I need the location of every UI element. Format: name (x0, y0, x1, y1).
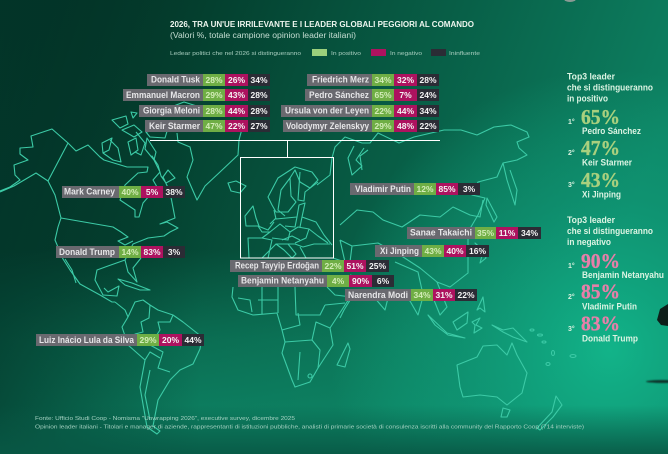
rank 1 negative: 90% (581, 249, 620, 273)
title: 2026, TRA UN'UE IRRILEVANTE E I LEADER GLOBALI PEGGIORI AL COMANDO (170, 20, 474, 29)
bar: Pedro Sánchez: 24% (419, 90, 437, 100)
bar: Luiz Inácio Lula da Silva: Luiz Inácio Lula da Silva (39, 335, 135, 345)
bar: Friedrich Merz: 34% (374, 75, 392, 85)
rank 2 negative (568, 280, 637, 312)
bar: Sanae Takaichi: Sanae Takaichi (410, 228, 472, 238)
bar: Mark Carney: 38% (165, 187, 183, 197)
rank 1 positive: 1° (568, 118, 575, 126)
bar: Giorgia Meloni: 28% (250, 106, 268, 116)
bar: Volodymyr Zelenskyy: 29% (374, 121, 392, 131)
rank 3 positive (568, 168, 621, 200)
source footnote: Opinion leader italiani - Titolari e manager di aziende, rappresentanti di istituzioni pubbliche, analisti di primarie società di consulenza iscritti alla community del Rapporto Coop (714 interviste) (35, 424, 584, 430)
bar: Donald Trump: Donald Trump (59, 247, 115, 257)
bar: Ursula von der Leyen: 22% (374, 106, 392, 116)
heading: top 3 negative: in negativo (567, 237, 612, 247)
bar: Donald Tusk (147, 74, 270, 86)
legend: In negativo (390, 51, 422, 57)
heading: top 3 negative: che si distingueranno (567, 226, 654, 236)
rank 2 negative: 85% (581, 280, 620, 304)
bar: Donald Tusk: 28% (205, 75, 223, 85)
heading: top 3 negative (567, 215, 654, 247)
bar: Friedrich Merz (307, 74, 439, 86)
heading: top 3 positive: in positivo (567, 94, 609, 104)
bar: Sanae Takaichi: 34% (521, 228, 538, 238)
heading: top 3 positive: che si distingueranno (567, 82, 654, 92)
bar: Ursula von der Leyen: Ursula von der Leyen (285, 106, 369, 116)
bar: Giorgia Meloni: Giorgia Meloni (143, 106, 200, 116)
rank 1 positive (568, 105, 642, 136)
bar: Vladimir Putin: 3% (463, 184, 476, 194)
bar: Friedrich Merz: Friedrich Merz (312, 74, 369, 84)
rank 3 positive: 43% (581, 168, 620, 192)
rank 2 positive: Keir Starmer (582, 158, 633, 168)
map: Africa (232, 287, 352, 387)
bar: Keir Starmer: 47% (205, 121, 223, 131)
bar: Volodymyr Zelenskyy: 22% (419, 121, 437, 131)
bar: Luiz Inácio Lula da Silva (36, 334, 204, 346)
legend (170, 49, 480, 57)
legend: In positivo (331, 51, 361, 57)
bar: Recep Tayyip Erdoğan: 22% (324, 261, 342, 271)
bar: Xi Jinping: 16% (469, 246, 486, 256)
bar: Emmanuel Macron (123, 89, 270, 101)
bar: Donald Trump (56, 246, 185, 258)
bar: Sanae Takaichi: 11% (499, 228, 516, 238)
bar: Donald Tusk: 26% (228, 75, 245, 85)
rank 2 positive (568, 136, 633, 168)
bar: Keir Starmer: 27% (250, 121, 268, 131)
bar: Ursula von der Leyen (281, 105, 439, 117)
map: North America (0, 112, 178, 302)
bar: Pedro Sánchez: Pedro Sánchez (309, 90, 369, 100)
bar: Benjamin Netanyahu: 90% (352, 276, 369, 286)
bar: Vladimir Putin: Vladimir Putin (355, 184, 411, 194)
subtitle: (Valori %, totale campione opinion leader italiani) (170, 31, 356, 40)
bar: Volodymyr Zelenskyy (283, 120, 439, 132)
bar: Ursula von der Leyen: 44% (397, 106, 414, 116)
bar: Mark Carney: Mark Carney (64, 186, 115, 196)
bar: Friedrich Merz: 28% (419, 75, 437, 85)
bar: Donald Tusk: Donald Tusk (151, 74, 201, 84)
bar: Pedro Sánchez: 65% (374, 90, 392, 100)
bar: Luiz Inácio Lula da Silva: 44% (184, 335, 202, 345)
legend: Ininfluente (449, 51, 480, 57)
map: Europe (245, 167, 332, 258)
bar: Ursula von der Leyen: 34% (419, 106, 437, 116)
rank 2 positive: 2° (568, 149, 575, 157)
bar: Mark Carney (62, 186, 185, 198)
bar: Emmanuel Macron: 29% (205, 90, 223, 100)
bar: Vladimir Putin: 12% (416, 184, 434, 194)
panel: top 3 positive (567, 72, 654, 200)
bar: Friedrich Merz: 32% (397, 75, 414, 85)
bar: Luiz Inácio Lula da Silva: 20% (162, 335, 179, 345)
decorative object at right edge (564, 0, 668, 383)
connector lines and Europe box (150, 140, 440, 258)
rank 1 negative (568, 249, 664, 280)
bar: Keir Starmer: 22% (228, 121, 245, 131)
bar: Giorgia Meloni: 44% (228, 106, 245, 116)
bar: Xi Jinping: 43% (424, 246, 442, 256)
map: South America (115, 300, 202, 434)
bar: Sanae Takaichi: 35% (477, 228, 494, 238)
bar: Benjamin Netanyahu: Benjamin Netanyahu (241, 276, 324, 286)
bar: Benjamin Netanyahu: 6% (377, 276, 390, 286)
bar: Narendra Modi: 22% (457, 290, 475, 300)
bar: Giorgia Meloni (139, 105, 270, 117)
bar: Emmanuel Macron: 43% (228, 90, 245, 100)
rank 3 positive: 3° (568, 181, 575, 189)
world map outline (0, 102, 576, 434)
bar: Emmanuel Macron: Emmanuel Macron (126, 90, 200, 100)
rank 1 negative: 1° (568, 262, 575, 270)
bar: Donald Tusk: 34% (250, 75, 268, 85)
map: Asia (317, 125, 529, 318)
bar: Donald Trump: 14% (121, 247, 139, 257)
rank 2 negative: Vladimir Putin (582, 302, 637, 312)
legend: Ledear politici che nel 2026 si distingueranno (170, 51, 301, 57)
bar: Recep Tayyip Erdoğan (230, 260, 389, 272)
bar: Recep Tayyip Erdoğan: 51% (346, 261, 364, 271)
rank 1 positive: 65% (581, 105, 620, 129)
bar: Narendra Modi: 34% (413, 290, 431, 300)
map: Greenland and Iceland (171, 102, 246, 200)
heading: top 3 positive (567, 72, 654, 104)
bar: Pedro Sánchez: 7% (399, 90, 412, 100)
bar: Narendra Modi: Narendra Modi (348, 290, 408, 300)
rank 3 negative (568, 312, 639, 344)
rank 2 positive: 47% (581, 136, 620, 160)
rank 3 positive: Xi Jinping (582, 190, 621, 200)
bar: Recep Tayyip Erdoğan: 25% (369, 261, 386, 271)
bar: Emmanuel Macron: 28% (250, 90, 268, 100)
bar: Volodymyr Zelenskyy: 48% (397, 121, 414, 131)
bar: Xi Jinping: 40% (446, 246, 464, 256)
bar: Benjamin Netanyahu: 4% (332, 276, 345, 286)
source footnote (35, 416, 584, 430)
bar: Giorgia Meloni: 28% (205, 106, 223, 116)
rank 3 negative: 3° (568, 325, 575, 333)
panel: top 3 negative (567, 215, 664, 344)
rank 3 negative: 83% (581, 312, 620, 336)
rank 3 negative: Donald Trump (582, 334, 639, 344)
bar: Recep Tayyip Erdoğan: Recep Tayyip Erdoğan (235, 260, 319, 270)
bar: Donald Trump: 3% (168, 247, 181, 257)
source footnote: Fonte: Ufficio Studi Coop - Nomisma "Unwrapping 2026", executive survey, dicembre 2025 (35, 416, 295, 422)
bar: Sanae Takaichi (407, 227, 541, 239)
bar: Mark Carney: 5% (146, 187, 159, 197)
heading: top 3 positive: Top3 leader (567, 72, 616, 82)
bar: Vladimir Putin (350, 183, 480, 195)
bar: Keir Starmer: Keir Starmer (149, 121, 200, 131)
bar: Donald Trump: 83% (143, 247, 161, 257)
rank 1 positive: Pedro Sánchez (582, 126, 642, 136)
bar: Keir Starmer (145, 120, 270, 132)
map: Southeast Asia and Oceania (428, 297, 576, 430)
bar: Benjamin Netanyahu (238, 275, 394, 287)
bar: Vladimir Putin: 85% (438, 184, 456, 194)
bar: Luiz Inácio Lula da Silva: 29% (139, 335, 157, 345)
rank 1 negative: Benjamin Netanyahu (582, 270, 664, 280)
rank 2 negative: 2° (568, 293, 575, 301)
bar: Xi Jinping (375, 245, 489, 257)
heading: top 3 negative: Top3 leader (567, 215, 616, 225)
bar: Narendra Modi: 31% (435, 290, 453, 300)
bar: Mark Carney: 40% (121, 187, 139, 197)
bar: Xi Jinping: Xi Jinping (380, 246, 419, 256)
bar: Narendra Modi (345, 289, 477, 301)
bar: Pedro Sánchez (305, 89, 439, 101)
bar: Volodymyr Zelenskyy: Volodymyr Zelenskyy (286, 121, 369, 131)
